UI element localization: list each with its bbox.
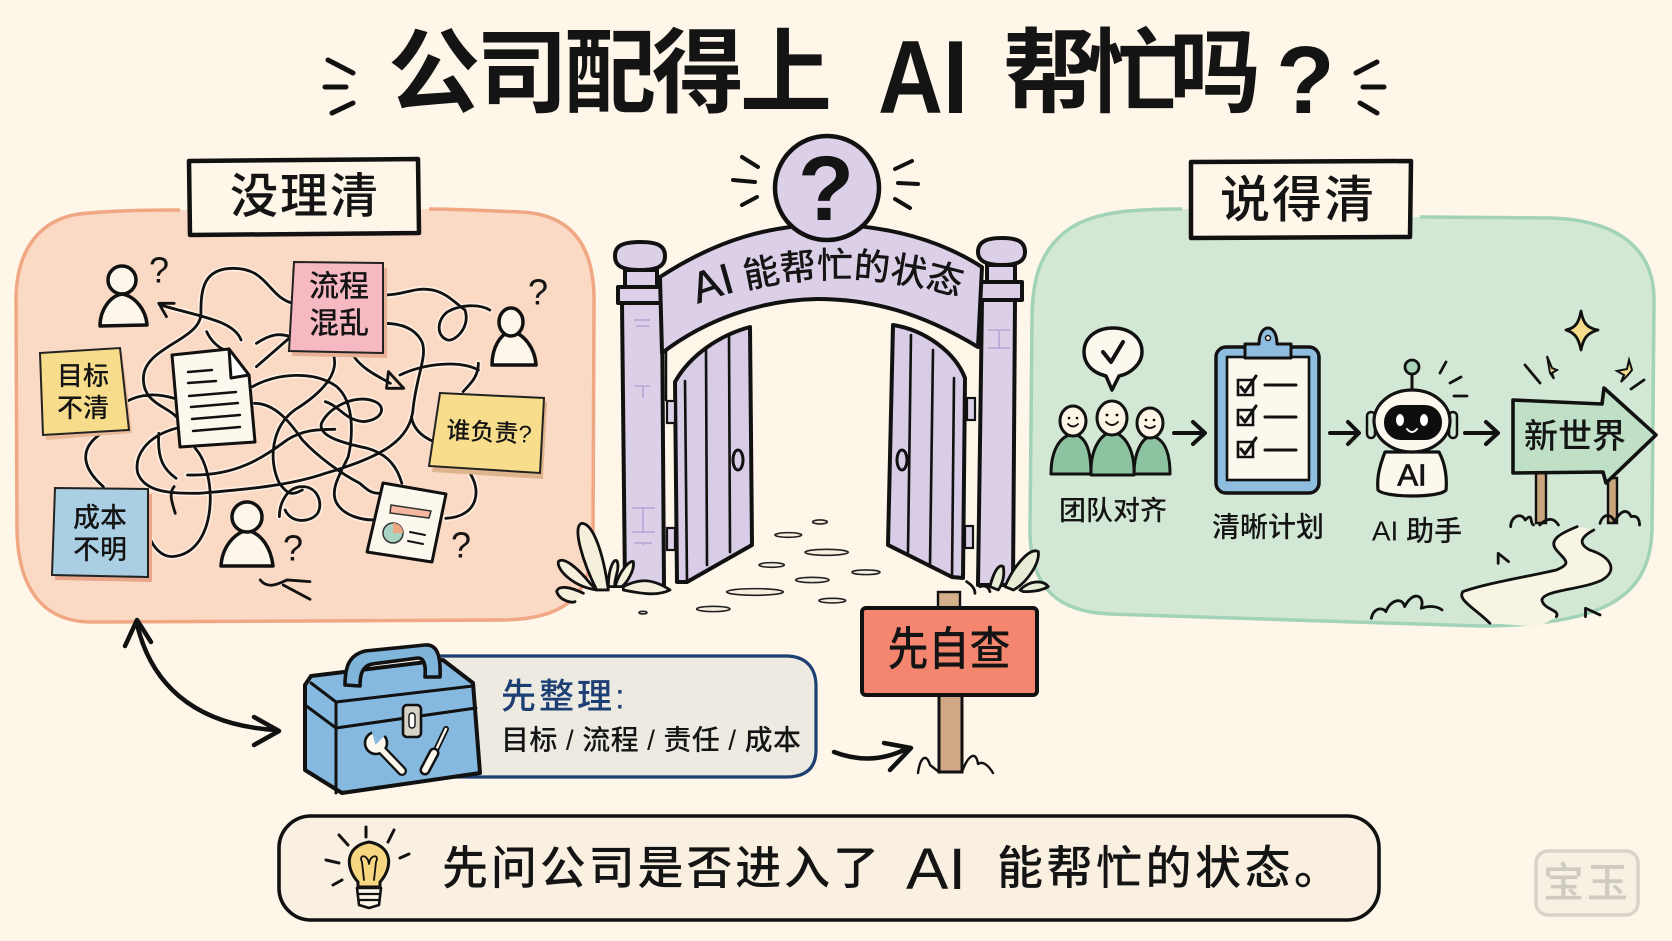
heading: 说得清: 说得清 [1220,172,1376,228]
sticky: 成本不明: 成本 [73,503,127,533]
label: 清晰计划: 清晰计划 [1212,512,1324,542]
callout: 先整理: 目标 / 流程 / 责任 / 成本 [501,724,801,756]
title rays [325,60,1384,113]
road and grass [1371,511,1640,627]
title: 帮忙吗 [1003,23,1261,125]
icon: team with check bubble [1051,328,1170,475]
icon: question circle: ? [798,138,854,240]
sign: 先自查 [862,592,1037,773]
arrow: AI to sign [1465,422,1498,444]
title: 公司配得上 [388,23,832,125]
watermark: 宝玉 [1536,851,1638,915]
icon: report: ? [451,524,471,566]
label: AI 助手: AI 助手 [1372,516,1462,546]
sticky: 目标不清: 目标 [57,361,109,391]
heading: 没理清: 没理清 [230,170,380,224]
sign: 新世界: 新世界 [1524,418,1626,456]
sticky: 成本不明 [52,488,152,582]
sticky: 成本不明: 不明 [73,535,127,565]
question rays [733,157,918,208]
arrow: curved double-headed [125,620,279,745]
sticky: 谁负责: 谁负责? [446,417,532,449]
speech bubble [1084,328,1142,390]
icon: person right: ? [528,272,548,312]
gate left door [666,327,752,582]
callout: bottom takeaway: 能帮忙的状态。 [997,842,1340,894]
right bush [967,551,1048,593]
callout: bottom takeaway: AI [906,837,966,902]
heading: 没理清 [189,159,419,235]
title [388,20,1335,136]
callout: 先整理: 先整理: [501,678,628,716]
arrow: plan to AI [1330,422,1359,444]
icon: robot: AI [1397,458,1427,492]
icon: toolbox [305,645,480,793]
icon: screwdriver [425,729,446,770]
icon: person top-left [100,250,169,326]
sign: 新世界 [1513,388,1656,523]
callout: 先整理 [430,656,816,777]
icon: person bottom: ? [283,528,303,568]
gate left pillar [615,242,665,587]
panel: 说得清 [1030,161,1656,627]
sticky: 流程混乱 [289,262,387,358]
sticky: 目标不清: 不清 [57,393,109,423]
icon: light bulb [326,827,409,908]
pillar faint marks [632,320,1010,545]
sticky: 流程混乱: 流程 [309,270,369,304]
gate right door [888,325,975,578]
path stones [639,520,880,614]
icon: person right [492,272,548,365]
icon: clipboard [1216,328,1319,493]
arrow: team to plan [1174,422,1205,444]
left bush [557,523,670,602]
callout: bottom takeaway: 先问公司是否进入了 [442,842,879,894]
sticky: 流程混乱: 混乱 [309,308,369,340]
icon: report [367,483,471,566]
icon: sparkle stars [1525,311,1644,389]
icon: question circle [775,136,879,240]
arrow: to check sign [834,743,911,770]
sign: 先自查: 先自查 [888,625,1010,675]
heading: 说得清 [1191,161,1411,238]
icon: document [172,349,255,447]
callout: bottom takeaway [279,816,1379,920]
sticky: 谁负责 [429,393,547,479]
sticky: 目标不清 [40,348,132,440]
label: 团队对齐: 团队对齐 [1059,496,1167,526]
icon: robot [1367,360,1467,496]
gate right pillar [978,238,1025,585]
tangled lines [86,268,490,599]
gate [555,134,1050,615]
title: AI [878,20,968,136]
gate arch banner [658,225,984,354]
icon: wrench [365,729,402,771]
icon: person bottom [221,502,303,568]
watermark: 宝玉: 宝玉 [1543,860,1631,906]
gate arch banner: AI 能帮忙的状态 [697,247,964,304]
title: ? [1276,27,1335,134]
panel: 没理清 [16,159,594,622]
icon: person top-left: ? [149,250,169,290]
